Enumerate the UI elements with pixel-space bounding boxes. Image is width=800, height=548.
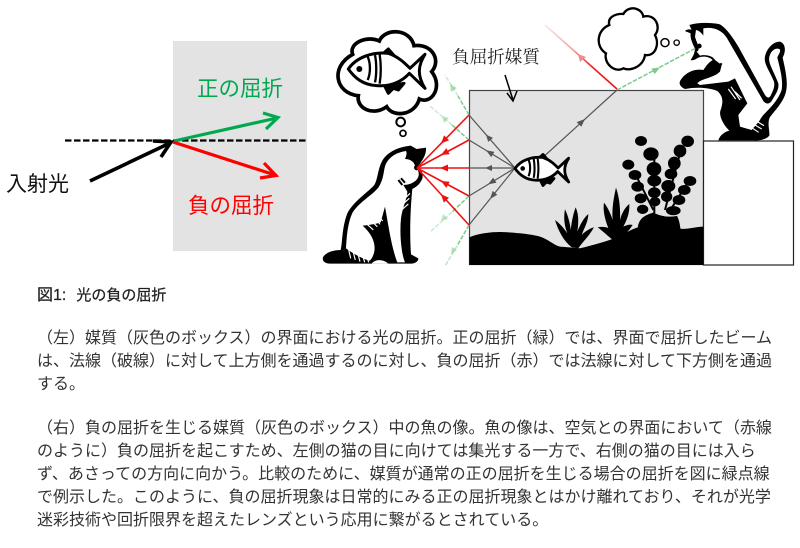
icon: left thought bubble with fish [338, 32, 436, 136]
arrow: incident ray [90, 141, 171, 181]
arrow: negative refraction [173, 142, 276, 178]
icon: right thought bubble [599, 8, 679, 70]
text block: right explanation: で例示した。このように、負の屈折現象は日常的にみる正の屈折現象とはかけ離れており、それが光学 [37, 489, 771, 506]
text block: left explanation [37, 329, 772, 393]
tank medium [470, 90, 704, 264]
stand box [704, 141, 794, 265]
text block: right explanation: ず、あさっての方向に向かう。比較のために、媒質が通常の正の屈折を生じる場合の屈折を図に緑点線 [37, 466, 770, 483]
text block: left explanation: （左）媒質（灰色のボックス）の界面における光の屈折。正の屈折（緑）では、界面で屈折したビーム [37, 330, 772, 347]
arrow: positive refraction [174, 113, 278, 141]
tank floor and plants [469, 136, 703, 265]
label: negative refraction: 負の屈折 [188, 194, 274, 218]
panel: aquarium [452, 47, 794, 265]
rays: red negative refraction [417, 25, 617, 225]
label: positive refraction: 正の屈折 [197, 77, 283, 101]
diagram: refraction and cats [6, 7, 794, 266]
icon: fish in tank [515, 154, 569, 185]
label: incident light: 入射光 [6, 173, 69, 196]
icon: right cat [680, 23, 787, 140]
icon: left cat [323, 146, 426, 264]
text block: right explanation: 迷彩技術や回折限界を超えたレンズという応用に繋がるとされている。 [37, 512, 548, 529]
text block: right explanation [37, 419, 772, 529]
text block: right explanation: （右）負の屈折を生じる媒質（灰色のボックス）中の魚の像。魚の像は、空気との界面において（赤線 [37, 420, 772, 437]
arrow: medium pointer [505, 75, 517, 101]
rays: gray inside medium [469, 90, 617, 225]
panel: left refraction diagram [6, 41, 307, 251]
label: negative index medium: 負屈折媒質 [452, 47, 541, 67]
rays: green dashed positive refraction [430, 48, 696, 266]
gray medium box [173, 41, 307, 251]
text block: left explanation: する。 [37, 376, 85, 393]
text block: right explanation: のように）負の屈折を起こすため、左側の猫の目に向けては集光する一方で、右側の猫の目には入ら [37, 443, 756, 460]
text block: left explanation: は、法線（破線）に対して上方側を通過するのに対し、負の屈折（赤）では法線に対して下方側を通過 [37, 353, 772, 370]
figure title: 図1: 光の負の屈折 [37, 287, 166, 304]
